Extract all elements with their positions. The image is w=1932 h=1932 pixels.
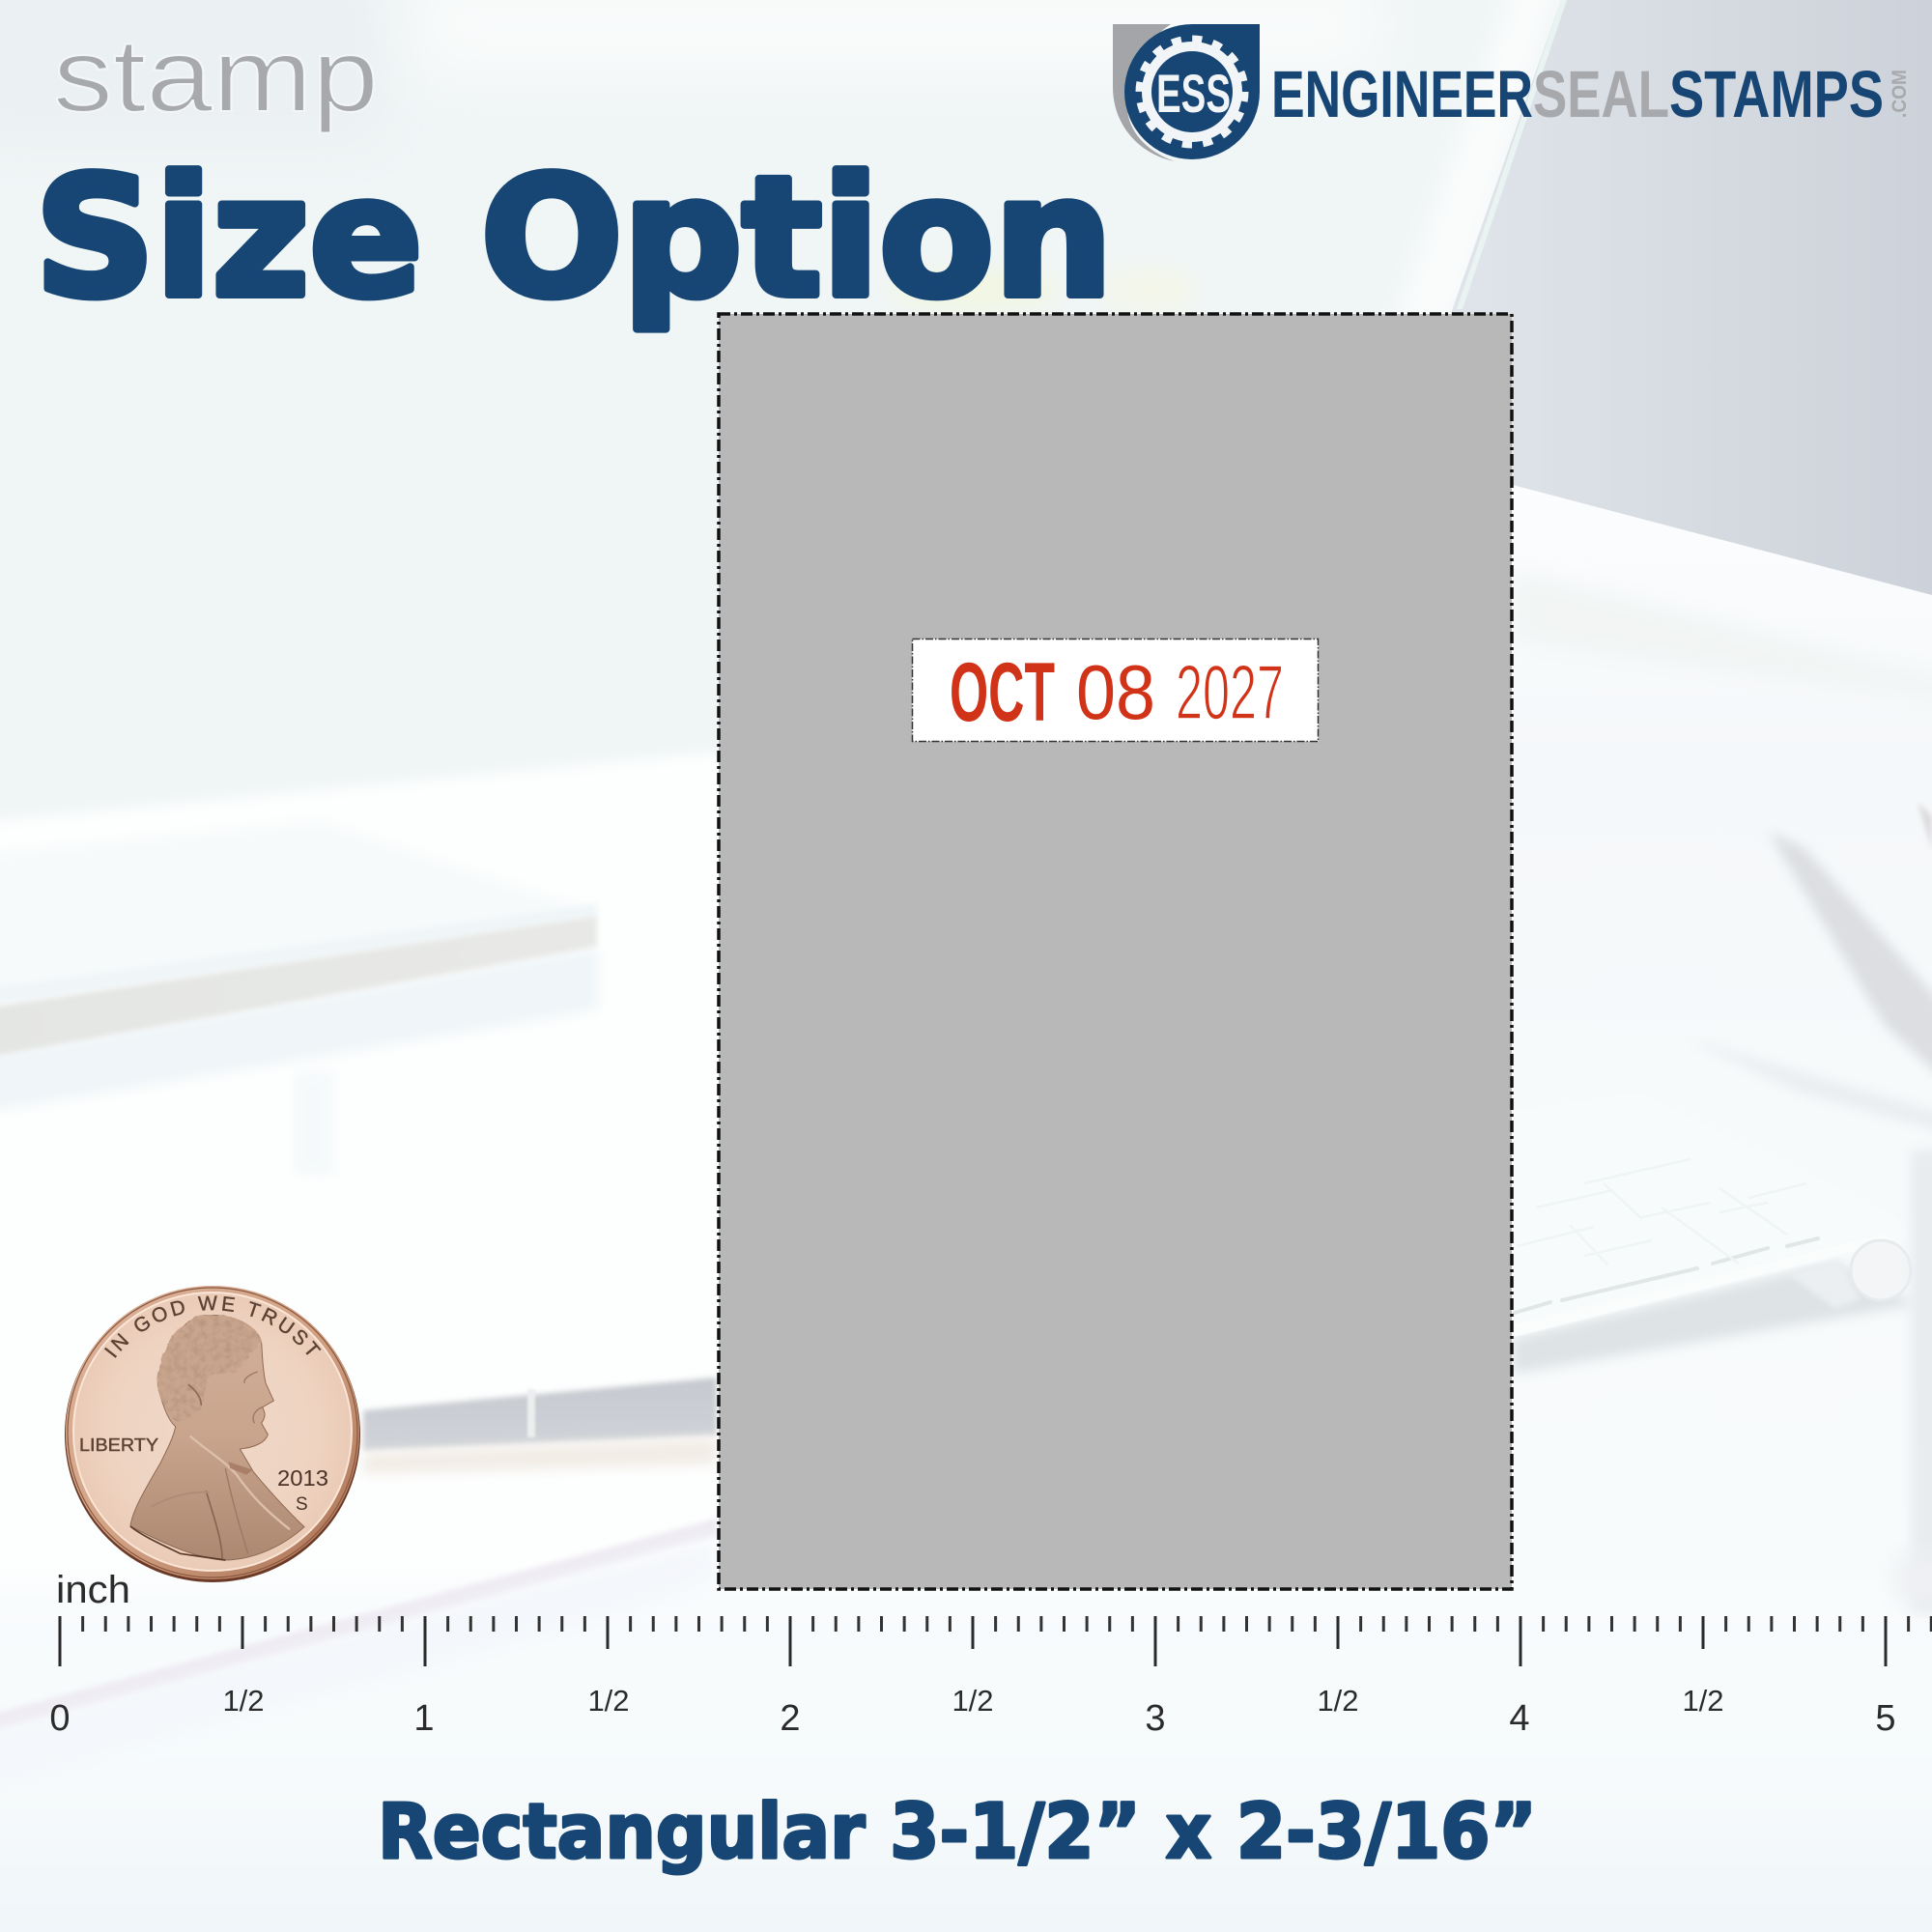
year 2013 S: 2013 — [277, 1465, 328, 1491]
date text — [950, 646, 1284, 739]
Lincoln bust — [130, 1315, 304, 1560]
ruler half-inch labels: 1/2 — [1682, 1684, 1724, 1718]
ruler half-inch labels: 1/2 — [952, 1684, 994, 1718]
date text: 08 — [1076, 649, 1155, 735]
penny for scale — [65, 1286, 360, 1582]
subtitle: stamp: stamp — [53, 16, 379, 133]
stamp size rectangle — [719, 314, 1512, 1589]
ruler whole-inch labels: 2 — [780, 1698, 801, 1739]
LIBERTY: LIBERTY — [79, 1435, 158, 1455]
year 2013 S: S — [296, 1494, 308, 1515]
logo: Engineer Seal Stamps — [1113, 24, 1911, 161]
date stamp impression — [912, 639, 1318, 742]
logo wordmark: ENGINEER — [1271, 57, 1533, 131]
ruler half-inch labels: 1/2 — [222, 1684, 265, 1718]
date text: OCT — [950, 646, 1055, 739]
logo .com: .COM — [1889, 70, 1911, 118]
penny inscription: IN GOD WE TRUST — [104, 1295, 321, 1358]
ruler whole-inch labels: 0 — [49, 1698, 71, 1739]
ruler whole-inch labels — [49, 1698, 1896, 1739]
ruler half-inch labels: 1/2 — [587, 1684, 630, 1718]
ruler half-inch labels: 1/2 — [1317, 1684, 1359, 1718]
logo wordmark: SEAL — [1533, 57, 1669, 131]
ruler half-inch labels — [222, 1684, 1724, 1718]
ruler whole-inch labels: 3 — [1145, 1698, 1166, 1739]
date box — [912, 639, 1318, 742]
penny body — [65, 1286, 360, 1582]
logo icon: gear seal: ESS — [1156, 63, 1231, 124]
ruler whole-inch labels: 4 — [1509, 1698, 1530, 1739]
ruler ticks — [58, 1616, 1932, 1666]
year 2013 S — [277, 1465, 328, 1515]
logo icon: gear seal — [1113, 24, 1260, 161]
size caption: Rectangular 3-1/2” x 2-3/16” — [378, 1789, 1537, 1876]
inch label: inch — [56, 1569, 130, 1611]
ruler whole-inch labels: 1 — [413, 1698, 435, 1739]
ruler whole-inch labels: 5 — [1875, 1698, 1896, 1739]
date text: 2027 — [1176, 649, 1284, 735]
title: Size Option: Size Option — [35, 142, 1113, 334]
